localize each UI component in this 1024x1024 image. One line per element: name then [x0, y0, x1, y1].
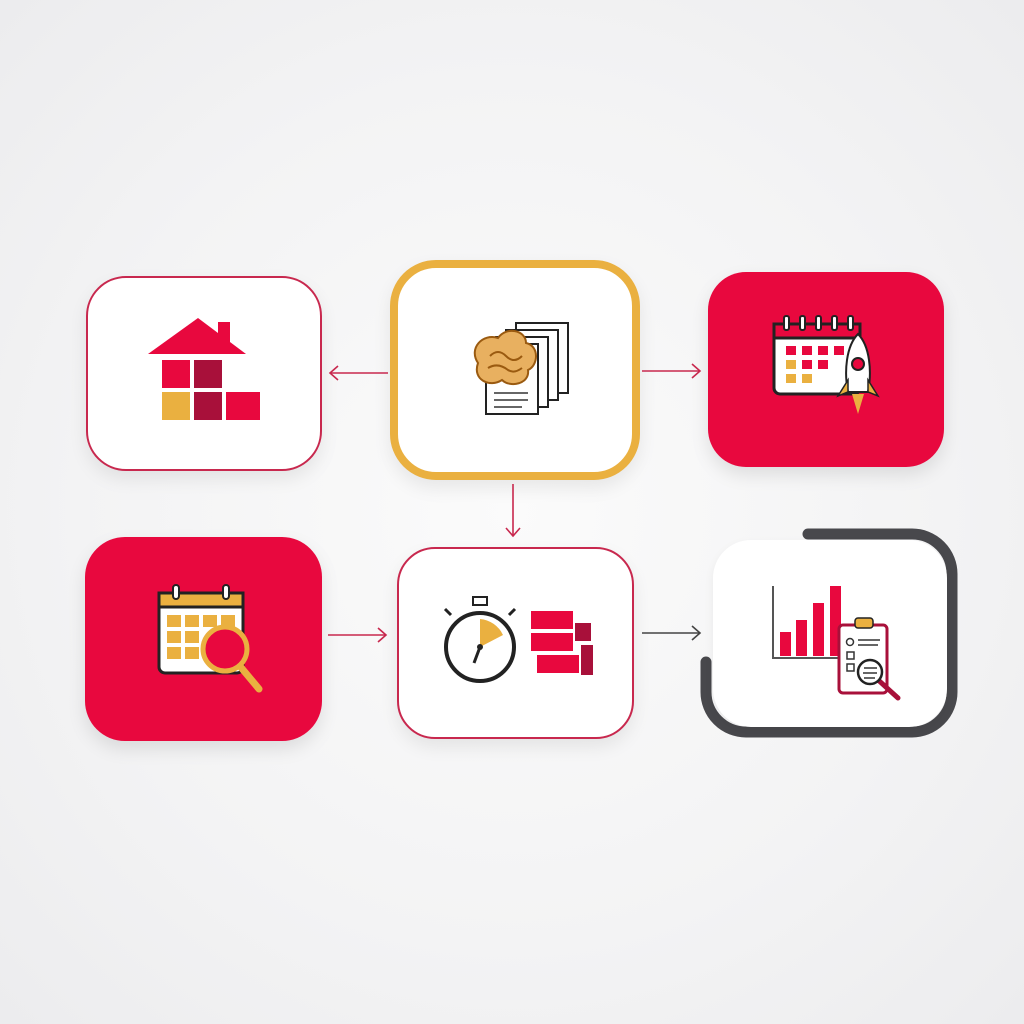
panel: calendar search (red) — [85, 537, 322, 741]
arrow: center to left — [328, 365, 388, 381]
arrow: center-bottom to right-bottom — [642, 625, 702, 641]
arrow: center down — [506, 484, 520, 538]
panel: stopwatch and blocks — [397, 547, 634, 739]
icon: stopwatch with stacked blocks — [444, 596, 593, 683]
panel: chart and clipboard (dark partial frame) — [700, 528, 958, 738]
arrow: center to right — [642, 363, 702, 379]
panel: house blocks — [86, 276, 322, 471]
icon: bar chart with clipboard magnifier — [772, 586, 900, 700]
icon: house made of blocks — [148, 318, 260, 420]
icon: brain with documents — [474, 322, 569, 415]
icon: calendar and rocket — [772, 315, 880, 414]
icon: calendar with magnifier — [158, 584, 262, 692]
panel: calendar with rocket (red) — [708, 272, 944, 467]
panel: ideas documents (center, yellow border) — [390, 260, 640, 480]
arrow: left-bottom to center-bottom — [328, 627, 388, 643]
